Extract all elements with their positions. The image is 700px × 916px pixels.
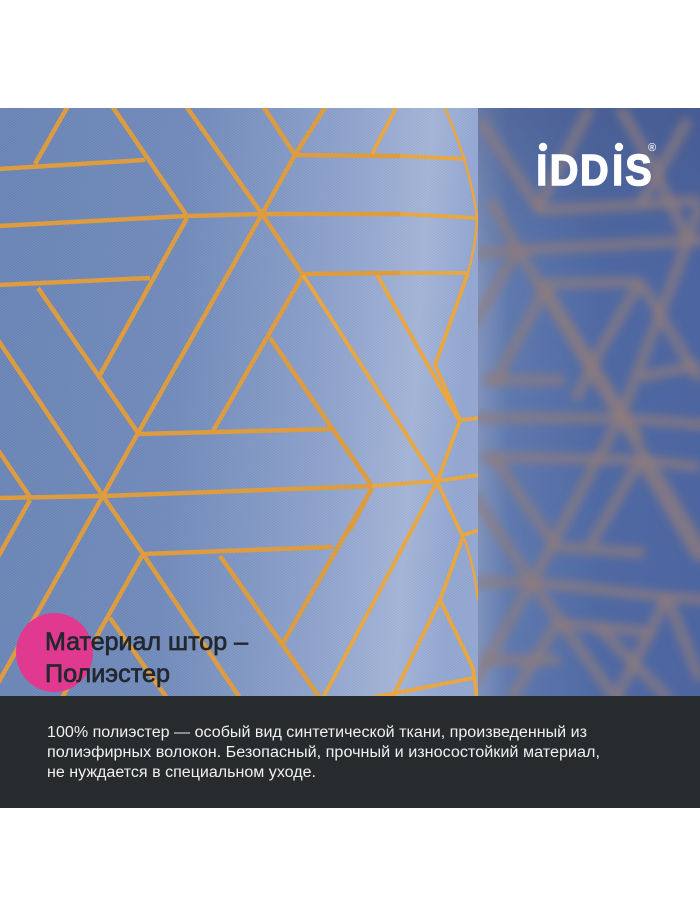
logo: IDDIS: IDDIS — [536, 145, 652, 194]
text block: description: не нуждается в специальном уходе. — [47, 764, 316, 781]
golden geometric lines — [0, 106, 400, 698]
icon: pink circle behind heading — [16, 613, 93, 692]
heading — [45, 628, 248, 688]
panel: back curtain layer, blurred — [470, 108, 700, 705]
heading: Полиэстер — [45, 660, 170, 688]
text block: description — [47, 724, 600, 781]
text block: description: полиэфирных волокон. Безопасный, прочный и износостойкий материал, — [47, 744, 600, 761]
panel: dark caption band — [0, 696, 700, 808]
heading: Материал штор – — [45, 628, 248, 656]
text block: description: 100% полиэстер — особый вид синтетической ткани, произведенный из — [47, 724, 587, 741]
panel: front curtain fabric with geometric pattern — [0, 106, 480, 698]
logo: IDDIS: ® — [648, 142, 656, 154]
